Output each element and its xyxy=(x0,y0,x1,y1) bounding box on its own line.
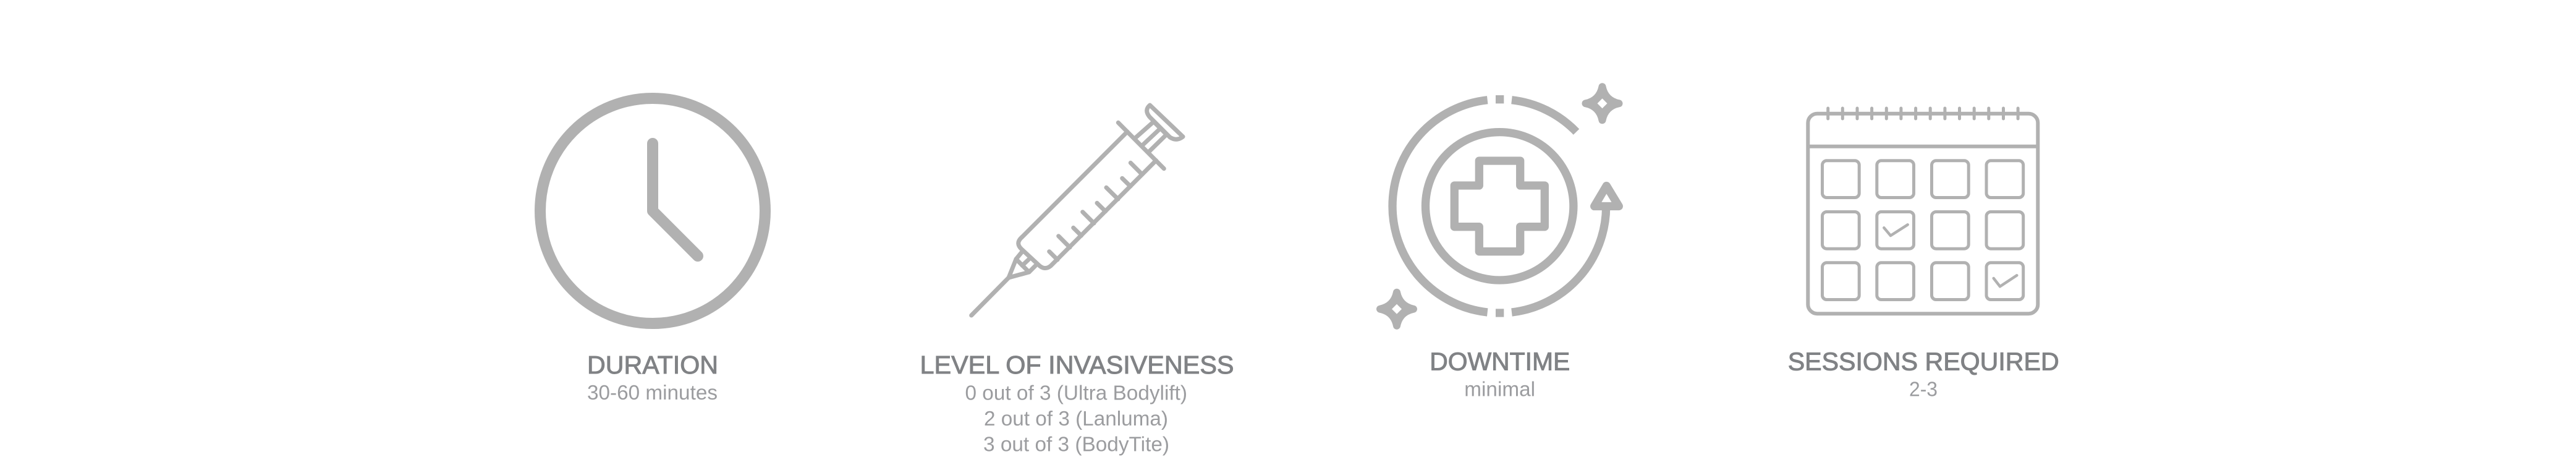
icon: clock xyxy=(540,98,765,323)
icon: recovery cross xyxy=(1392,100,1619,313)
heading: level of invasiveness: LEVEL OF INVASIVENESS xyxy=(920,351,1234,379)
icon: calendar xyxy=(1808,108,2038,314)
heading: downtime: DOWNTIME xyxy=(1430,348,1570,376)
text: sessions value: 2-3 xyxy=(1909,378,1938,401)
text: downtime value: minimal xyxy=(1464,378,1535,401)
panel: downtime xyxy=(1380,87,1619,401)
icon: syringe xyxy=(972,105,1183,315)
text: duration value: 30-60 minutes xyxy=(587,381,718,404)
icon: sparkle top right xyxy=(1586,87,1619,120)
text: invasiveness values: 2 out of 3 (Lanluma) xyxy=(984,407,1168,430)
text: invasiveness values: 0 out of 3 (Ultra Bodylift) xyxy=(965,381,1187,404)
panel: level of invasiveness xyxy=(920,105,1234,455)
text: invasiveness values xyxy=(965,381,1187,455)
panel: sessions required xyxy=(1788,108,2059,401)
text: invasiveness values: 3 out of 3 (BodyTite) xyxy=(983,433,1169,455)
heading: duration: DURATION xyxy=(587,351,718,379)
heading: sessions required: SESSIONS REQUIRED xyxy=(1788,347,2059,375)
icon: sparkle bottom left xyxy=(1380,293,1413,326)
panel: duration xyxy=(540,98,765,404)
